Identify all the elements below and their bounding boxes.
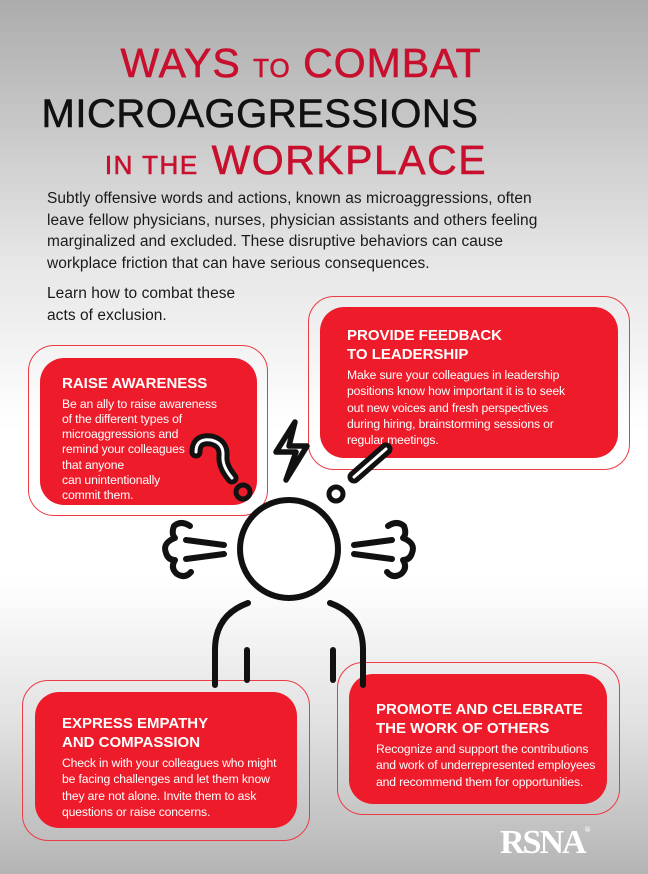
text: raise awareness: remind your colleagues (62, 442, 185, 456)
text: empathy: they are not alone. Invite them to ask (62, 789, 256, 803)
text: feedback (347, 368, 566, 447)
text: feedback: during hiring, brainstorming sessions or (347, 417, 554, 431)
intro text (47, 190, 537, 272)
intro text: leave fellow physicians, nurses, physician assistants and others feeling (47, 212, 537, 228)
icon: right puff (354, 523, 413, 576)
intro text 2: Learn how to combat these (47, 285, 235, 302)
icon: left puff (165, 523, 224, 576)
text: raise awareness: can unintentionally (62, 473, 160, 487)
panel: raise awareness (28, 345, 268, 516)
heading: feedback (347, 327, 502, 362)
heading: raise awareness: RAISE AWARENESS (62, 375, 207, 392)
title (42, 40, 487, 183)
intro text: marginalized and excluded. These disruptive behaviors can cause (47, 233, 503, 250)
icon: head (240, 500, 338, 598)
logo: RSNA: RSNA® (500, 824, 591, 861)
intro text: workplace friction that can have serious consequences. (47, 254, 430, 272)
panel: promote (337, 662, 620, 815)
text: empathy: questions or raise concerns. (62, 805, 210, 819)
text: raise awareness: of the different types of (62, 412, 182, 426)
icon: body (215, 603, 363, 685)
heading: feedback: TO LEADERSHIP (347, 346, 468, 362)
title line 2: MICROAGGRESSIONS (42, 92, 478, 136)
text: promote: and recommend them for opportunities. (376, 775, 583, 789)
heading: promote: PROMOTE AND CELEBRATE (376, 701, 583, 718)
intro text: Subtly offensive words and actions, known as microaggressions, often (47, 190, 532, 207)
heading: empathy (62, 715, 208, 750)
text: promote (376, 742, 595, 789)
intro text 2: acts of exclusion. (47, 306, 167, 324)
heading: feedback: PROVIDE FEEDBACK (347, 327, 502, 344)
text: feedback: regular meetings. (347, 433, 439, 447)
heading: empathy: EXPRESS EMPATHY (62, 715, 208, 732)
title line 1: WAYS TO COMBAT (120, 40, 482, 86)
text: empathy (62, 756, 276, 819)
panel: empathy (22, 680, 310, 841)
text: feedback: positions know how important it is to seek (347, 384, 565, 398)
intro text 2 (47, 285, 235, 324)
text: raise awareness (62, 396, 217, 502)
text: feedback: out new voices and fresh perspectives (347, 401, 548, 415)
icon: question mark (196, 440, 250, 499)
text: raise awareness: microaggressions and (62, 427, 178, 441)
heading: promote: THE WORK OF OTHERS (376, 720, 549, 736)
text: empathy: be facing challenges and let them know (62, 772, 270, 786)
heading: empathy: AND COMPASSION (62, 734, 200, 750)
text: raise awareness: Be an ally to raise awareness (62, 396, 217, 410)
heading: promote (376, 701, 583, 736)
icon: lightning (276, 422, 307, 480)
text: feedback: Make sure your colleagues in leadership (347, 368, 559, 382)
text: raise awareness: commit them. (62, 488, 133, 502)
text: empathy: Check in with your colleagues who might (62, 756, 276, 770)
title line 3: IN THE WORKPLACE (105, 137, 487, 183)
text: raise awareness: that anyone (62, 458, 124, 472)
icon: exclamation (329, 449, 386, 501)
text: promote: and work of underrepresented employees (376, 758, 595, 772)
panel: feedback (308, 296, 630, 470)
text: promote: Recognize and support the contributions (376, 742, 588, 756)
